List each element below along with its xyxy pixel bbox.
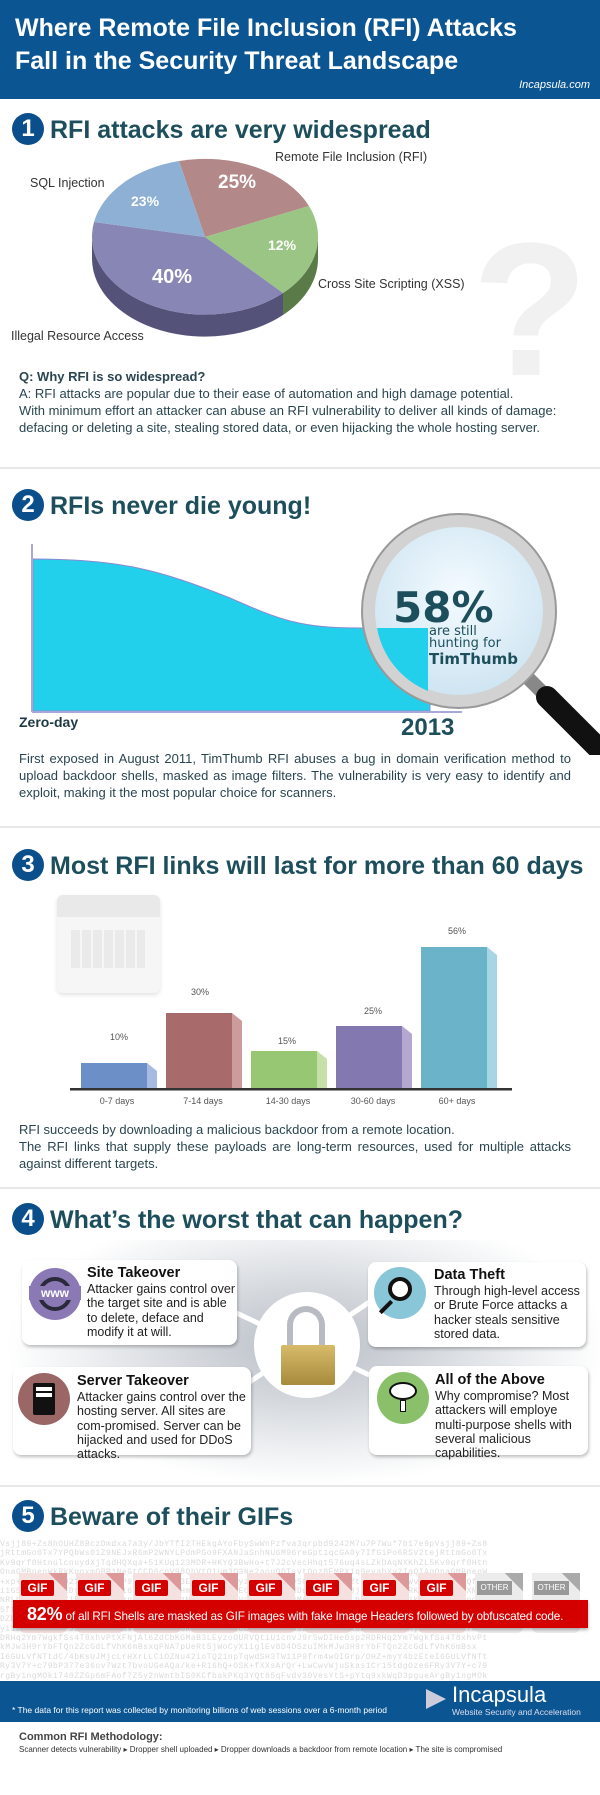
box: Server Takeover: Server Takeover (77, 1373, 189, 1389)
text: common RFI methodology (19, 1731, 502, 1754)
box: Data Theft: Through high-level access or Brute Force attacks a hacker steals sensitive stored data. (434, 1284, 580, 1341)
magnifier: 58% TimThumb: are still (429, 624, 477, 639)
heading 1: RFI attacks are very widespread (50, 116, 431, 144)
heading 5: 5 (21, 1502, 35, 1529)
bar chart: 30-60 days (351, 1096, 396, 1106)
magnifier: 58% TimThumb: 58% (393, 583, 494, 632)
magnifier: 58% TimThumb: hunting for (429, 636, 501, 651)
pie chart: 40% (152, 266, 192, 288)
box: Server Takeover (13, 1367, 251, 1455)
GIF icons row: GIF (370, 1581, 390, 1595)
pie chart: Remote File Inclusion (RFI) (275, 150, 427, 164)
text: TimThumb paragraph: First exposed in August 2011, TimThumb RFI abuses a bug in domain verification method to upload backdoor shells, masked as image filters. The vulnerability is very easy to identify and exploit, making it the most popular choice for scanners. (19, 751, 571, 800)
bar chart: 60+ days (439, 1096, 476, 1106)
code background: yi1LTomQ4RfkPJdbzEcoUDNavfWyJx0PIWGRbqbNbQL3xCc9YjQvMtJp5ZlhLdr7BWk8wGFKmsgjeMyi1LTomQ4RfkPJ (0, 1625, 488, 1634)
panel: outcomes background (0, 1240, 600, 1485)
GIF icons row: OTHER (480, 1583, 508, 1592)
heading 4: 4 (21, 1205, 35, 1232)
code background: 5ftKpb3Hn5ebSjLzv7Zq9mXrfYzwQ2Tp4nQ71rbCWhl8LSPq7WNoyQl2Wk7rtwkBNUV9oEtLxUftsa7L5ftKpb3Hn5eb (0, 1606, 488, 1615)
title: Where Remote File Inclusion (RFI) Attacks (15, 14, 517, 42)
text: RFI links paragraph: RFI succeeds by downloading a malicious backdoor from a remote location. (19, 1122, 455, 1137)
GIF icons row: GIF (198, 1581, 218, 1595)
GIF icons row (19, 1573, 580, 1633)
icon: www globe: www (41, 1286, 69, 1300)
box: Server Takeover: Attacker gains control over the hosting server. All sites are com-promised. Server can be hijacked and used for DDoS attacks. (77, 1390, 246, 1461)
bar chart: 56% (448, 926, 466, 936)
pie chart: 23% (131, 193, 160, 209)
text: RFI links paragraph: The RFI links that supply these payloads are long-term resources, used for multiple attacks against different targets. (19, 1139, 571, 1171)
bar chart: 25% (364, 1006, 382, 1016)
connector lines (237, 1300, 370, 1384)
GIF icons row: GIF (28, 1581, 48, 1595)
code background: DZbfEZFqyDKVwUiZ8MxmHR3xbdSf9qEv1Nnb2cupMsN7KkUmPcrUYqA4jJHCNGRTh2rnMafHBvsdSu8DZbfEZFqyDKVw (0, 1615, 488, 1624)
box: Data Theft: Data Theft (434, 1267, 505, 1283)
box: All of the Above (369, 1366, 588, 1455)
text: Q&A: With minimum effort an attacker can abuse an RFI vulnerability to deliver all kinds of damage: (19, 403, 556, 418)
icon: mushroom cloud (377, 1372, 429, 1424)
box: All of the Above: Why compromise? Most attackers will employe multi-purpose shells with several malicious capabilities. (435, 1389, 572, 1460)
header banner (0, 0, 600, 99)
box: Site Takeover (22, 1260, 237, 1345)
magnifier: 58% TimThumb (361, 513, 600, 755)
magnifier: 58% TimThumb: TimThumb (429, 650, 518, 668)
bar chart: 30% (191, 987, 209, 997)
pie chart (11, 150, 465, 343)
footer bar (0, 1681, 600, 1722)
red banner: 82%: 82% of all RFI Shells are masked as GIF images with fake Image Headers followed by obfuscated code. (27, 1604, 563, 1624)
code background: i1G5RpXNC8PbEDt0q9/6b+1169no3r2RKmHmjMcmj1QzWECWG1zy7HxdDqDXAedePS0jt13/DGAuaRKtKfi1G5RpXNC8 (0, 1587, 488, 1596)
box: All of the Above: All of the Above (435, 1372, 545, 1388)
area chart (31, 544, 462, 713)
text: common RFI methodology: Scanner detects vulnerability ▸ Dropper shell uploaded ▸ Dropper downloads a backdoor from remote location ▸ The site is compromised (19, 1745, 502, 1754)
label: Zero-day: Zero-day (19, 714, 78, 730)
logo: Incapsula: Incapsula (452, 1682, 546, 1707)
text: Q&A (19, 369, 556, 435)
code background: Kv9qrf0HtnulcnuydXjTqdHQXqa+51KUq123MDR+HKYQ3BwHo+t7J2cVecHhqt576uq4sLZkDAqNXKhZL5Kv9qrf0Htn (0, 1559, 488, 1568)
code background: rgBy1ngMOk1740ZZGp6mFAof7Z5y2nWmtbIS0KCfbakPKq3YQt85qFvdv30VesYtS+pYtq9xkWqD3pgueArgBy1ngMOk (0, 1672, 488, 1681)
code background: OnaGMBnenWkRkKqgxmQBB1NeGtCCD6cnV98QbVtOium3Q3Ne2aouQDTsvtQoz8EMPX1q9evabXv2IgQIAgOnaGMBnenW (0, 1568, 488, 1577)
pie chart: 12% (268, 237, 297, 253)
bar chart: 15% (278, 1036, 296, 1046)
heading 5: Beware of their GIFs (50, 1503, 293, 1531)
code background (0, 1540, 488, 1681)
icon: magnifier eye (374, 1267, 426, 1319)
heading 1: 1 (21, 115, 35, 142)
heading 4: What’s the worst that can happen? (50, 1206, 463, 1234)
GIF icons row: GIF (312, 1581, 332, 1595)
bar chart: 10% (110, 1032, 128, 1042)
box: Data Theft (368, 1262, 586, 1347)
GIF icons row: GIF (256, 1581, 276, 1595)
pie chart: SQL Injection (30, 176, 105, 190)
bar chart: 7-14 days (183, 1096, 223, 1106)
box: Site Takeover: Site Takeover (87, 1265, 180, 1281)
text: Q&A: A: RFI attacks are popular due to their ease of automation and high damage potential. (19, 386, 513, 401)
icon: server (18, 1373, 70, 1425)
icon: question mark: ? (472, 204, 588, 416)
code background: Ry3V7Y+c79bP377e36ov7Wzt7bvoUGeAQa/ke+R16hQ+OSK+fXXsArQr+LwCwvWjuSkas1Cr15tdgOze6FRy3V7Y+c79 (0, 1662, 488, 1671)
GIF icons row: GIF (426, 1581, 446, 1595)
text: common RFI methodology: Common RFI Methodology: (19, 1731, 163, 1743)
heading 3: Most RFI links will last for more than 60 days (50, 852, 583, 880)
icon: calendar (57, 895, 160, 993)
logo: Incapsula (426, 1682, 581, 1717)
code background: +xp+KWQfmA9HU23bqsayq/VP93n5jWeAFT3EV0UDKdUy2yzLwp91Bp995CqkCCTTdoZtBoWBnjmb+WvXzV+xp+KWQfmA (0, 1578, 488, 1587)
code background: I6GULVfNTtdC/4bKsUJMjcLrHXrLLCiOZNu42ioTQ21npTqwdSH3TW11P9frm4wOIGrp/OHZ+myY4bzEteI6GULVfNTt (0, 1653, 488, 1662)
icon: www globe (29, 1268, 81, 1320)
bar chart (70, 926, 512, 1106)
site url: Incapsula.com (519, 79, 590, 91)
label: 2013: 2013 (401, 714, 454, 741)
pie chart: Illegal Resource Access (11, 329, 144, 343)
GIF icons row: OTHER (538, 1583, 566, 1592)
heading 3: 3 (21, 851, 35, 878)
GIF icons row: GIF (84, 1581, 104, 1595)
box: Site Takeover: Attacker gains control over the target site and is able to delete, deface and modify it at will. (87, 1282, 235, 1339)
bar chart: 0-7 days (100, 1096, 135, 1106)
icon: padlock (254, 1292, 360, 1398)
logo: Incapsula: Website Security and Acceleration (452, 1707, 581, 1717)
title (15, 14, 517, 75)
code background: kMJw3H9rYbFTQn2ZcGdLfVhK6mBsxqPNA7pUeRt5jWoCyX1iglEv8D4OSzuIMkMJw3H9rYbFTQn2ZcGdLfVhK6mBsx (0, 1643, 477, 1652)
text: Q&A: defacing or deleting a site, stealing stored data, or even hijacking the whole hosting server. (19, 420, 540, 435)
bar chart: 14-30 days (266, 1096, 311, 1106)
pie chart: 25% (218, 172, 256, 193)
text: Q&A: Q: Why RFI is so widespread? (19, 369, 205, 384)
code background: jRttmGo0Tx7YPQbWs01Z9NEJxR6mP2WNYLPdmPGo9FXANJaSnhNU6M96reGpt1qcGA0y7IfGiPo6RSV2tejRttmGo0Tx (0, 1549, 488, 1558)
code background: DRHq2Ym7WgkfSs4T8xhvPtXFNjAl6ZdCbKGMaB3LEyzoOURVQtiU1cnvJ9r5wDIHe0sp2RDRHq2Ym7WgkfSs4T8xhvPt (0, 1634, 488, 1643)
heading 2: 2 (21, 491, 35, 518)
heading 2: RFIs never die young! (50, 492, 311, 520)
title: Fall in the Security Threat Landscape (15, 47, 458, 75)
text: RFI links paragraph (19, 1122, 571, 1171)
footnote: * The data for this report was collected by monitoring billions of web sessions over a 6-month period (12, 1705, 387, 1715)
code background: Vsjj89+Zs8hOUHZ8BczDmdxa7a3y/JbYTfI2THEkgAYoFbySwWnPzfva3qrpbd9242M7u7P7Wu*7b17e9pVsjj89+Zs8 (0, 1540, 488, 1549)
code background: NRLhZhKVlemOfjkq44LxiiMznqwpe8udkMzNMAxndu1JvVoVkmsgYDRvMpbQGDZhNRLhZhKVlemOfjkq44LxiiMznqwp (0, 1596, 488, 1605)
red banner: 82% (13, 1600, 588, 1628)
GIF icons row: GIF (142, 1581, 162, 1595)
pie chart: Cross Site Scripting (XSS) (318, 277, 465, 291)
